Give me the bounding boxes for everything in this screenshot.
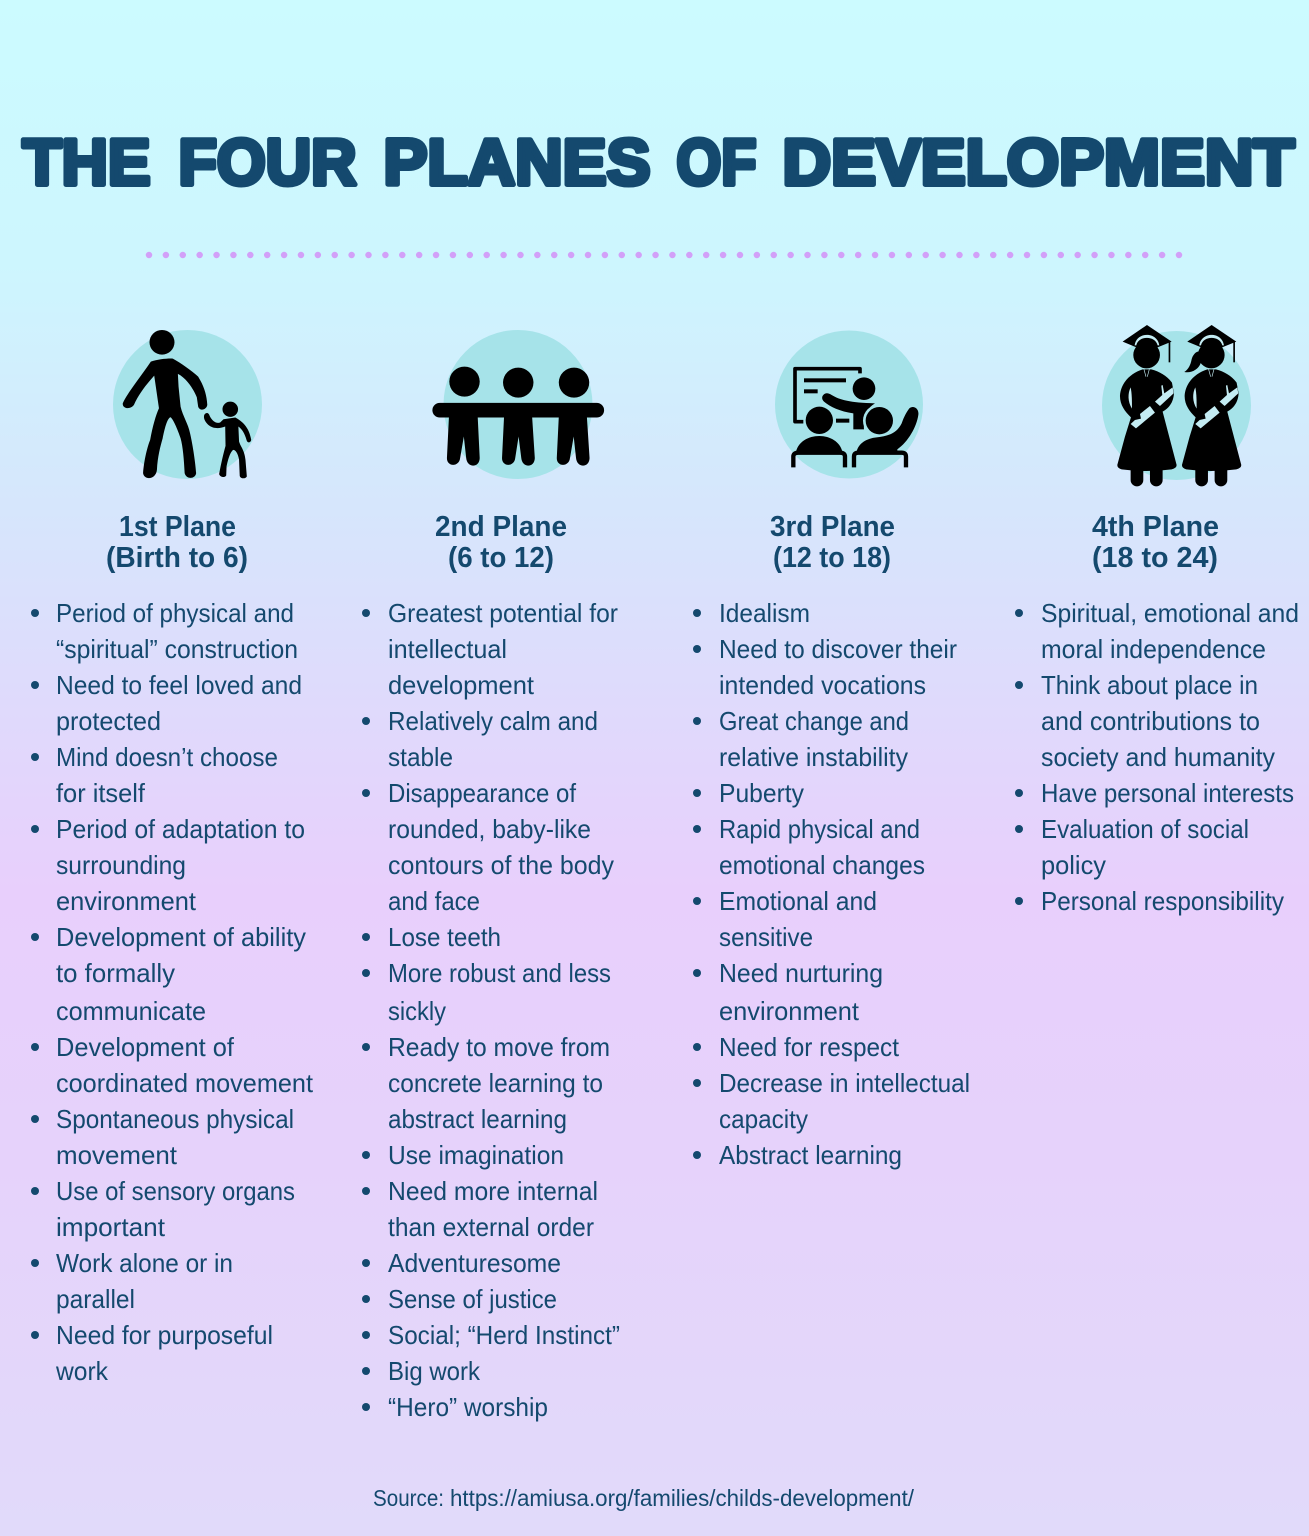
icon: three children holding a bar bbox=[432, 330, 604, 479]
bullet list: 2nd plane: intellectual bbox=[388, 634, 507, 664]
bullet list: 4th plane: Spiritual, emotional and bbox=[1041, 598, 1299, 628]
bullet list: 2nd plane bbox=[362, 598, 620, 1422]
bullet list: 1st plane: communicate bbox=[56, 996, 206, 1026]
bullet list: 3rd plane: Need to discover their bbox=[719, 634, 957, 664]
bullet list: 2nd plane: than external order bbox=[388, 1212, 594, 1242]
bullet list: 1st plane: parallel bbox=[56, 1284, 135, 1314]
bullet list: 1st plane: Development of ability bbox=[56, 922, 306, 952]
bullet list: 1st plane: movement bbox=[56, 1140, 178, 1170]
bullet list: 1st plane: Use of sensory organs bbox=[56, 1176, 295, 1206]
bullet list: 1st plane: Need to feel loved and bbox=[56, 670, 302, 700]
bullet list: 2nd plane: Disappearance of bbox=[388, 778, 577, 808]
bullet list: 2nd plane: Lose teeth bbox=[388, 922, 501, 952]
bullet list: 4th plane: Have personal interests bbox=[1041, 778, 1294, 808]
bullet list: 3rd plane bbox=[693, 598, 970, 1170]
icon: adult holding child's hand bbox=[113, 330, 262, 479]
bullet list: 2nd plane: abstract learning bbox=[388, 1104, 567, 1134]
heading: 2nd plane: (6 to 12) bbox=[448, 542, 554, 574]
title: DEVELOPMENT bbox=[782, 126, 1294, 198]
title: PLANES bbox=[384, 126, 650, 198]
bullet list: 2nd plane: “Hero” worship bbox=[388, 1392, 548, 1422]
bullet list: 3rd plane: environment bbox=[719, 996, 860, 1026]
bullet list: 2nd plane: stable bbox=[388, 742, 453, 772]
bullet list: 3rd plane: Need nurturing bbox=[719, 958, 883, 988]
icon: two graduates in caps and gowns bbox=[1102, 325, 1251, 486]
heading: 3rd plane bbox=[770, 511, 895, 574]
bullet list: 1st plane: “spiritual” construction bbox=[56, 634, 298, 664]
bullet list: 1st plane: important bbox=[56, 1212, 166, 1242]
title: THE bbox=[22, 126, 150, 198]
heading: 3rd plane: 3rd Plane bbox=[770, 511, 895, 543]
bullet list: 3rd plane: capacity bbox=[719, 1104, 808, 1134]
bullet list: 3rd plane: Idealism bbox=[719, 598, 810, 628]
bullet list: 4th plane: Think about place in bbox=[1041, 670, 1258, 700]
bullet list: 4th plane bbox=[1015, 598, 1299, 916]
bullet list: 4th plane: moral independence bbox=[1041, 634, 1266, 664]
bullet list: 2nd plane: Social; “Herd Instinct” bbox=[388, 1320, 620, 1350]
panel: 4th plane bbox=[1015, 325, 1299, 916]
source line: https://amiusa.org/families/childs-development/ bbox=[450, 1485, 915, 1511]
bullet list: 2nd plane: Ready to move from bbox=[388, 1032, 610, 1062]
bullet list: 1st plane: Development of bbox=[56, 1032, 235, 1062]
bullet list: 2nd plane: Use imagination bbox=[388, 1140, 564, 1170]
heading: 2nd plane bbox=[435, 511, 567, 574]
heading: 4th plane bbox=[1092, 511, 1219, 574]
bullet list: 2nd plane: Relatively calm and bbox=[388, 706, 598, 736]
panel: 3rd plane bbox=[693, 330, 970, 1170]
bullet list: 4th plane: society and humanity bbox=[1041, 742, 1275, 772]
bullet list: 2nd plane: Adventuresome bbox=[388, 1248, 561, 1278]
bullet list: 1st plane: work bbox=[55, 1356, 109, 1386]
bullet list: 2nd plane: Big work bbox=[388, 1356, 481, 1386]
bullet list: 3rd plane: Abstract learning bbox=[719, 1140, 902, 1170]
icon: teacher and students at a board bbox=[775, 330, 923, 478]
source line: Source: bbox=[373, 1485, 444, 1511]
bullet list: 3rd plane: intended vocations bbox=[719, 670, 926, 700]
bullet list: 2nd plane: Greatest potential for bbox=[388, 598, 618, 628]
bullet list: 1st plane: coordinated movement bbox=[56, 1068, 314, 1098]
panel: 1st plane bbox=[31, 330, 314, 1386]
bullet list: 1st plane: Period of physical and bbox=[56, 598, 294, 628]
bullet list: 3rd plane: relative instability bbox=[719, 742, 908, 772]
heading: 3rd plane: (12 to 18) bbox=[773, 542, 891, 574]
bullet list: 2nd plane: Need more internal bbox=[388, 1176, 598, 1206]
heading: 1st plane: 1st Plane bbox=[119, 511, 236, 543]
bullet list: 1st plane bbox=[31, 598, 314, 1386]
bullet list: 3rd plane: Need for respect bbox=[719, 1032, 900, 1062]
bullet list: 3rd plane: Emotional and bbox=[719, 886, 877, 916]
bullet list: 2nd plane: rounded, baby-like bbox=[388, 814, 591, 844]
bullet list: 4th plane: Evaluation of social bbox=[1041, 814, 1249, 844]
bullet list: 1st plane: Need for purposeful bbox=[56, 1320, 273, 1350]
bullet list: 3rd plane: Great change and bbox=[719, 706, 909, 736]
bullet list: 1st plane: environment bbox=[56, 886, 197, 916]
title: FOUR bbox=[178, 126, 356, 198]
bullet list: 1st plane: Work alone or in bbox=[56, 1248, 233, 1278]
bullet list: 2nd plane: contours of the body bbox=[388, 850, 614, 880]
bullet list: 2nd plane: development bbox=[388, 670, 535, 700]
ponytail bbox=[1184, 351, 1201, 372]
panel: 2nd plane bbox=[362, 330, 620, 1422]
title bbox=[22, 126, 1294, 198]
bullet list: 1st plane: Spontaneous physical bbox=[56, 1104, 294, 1134]
title: OF bbox=[676, 126, 756, 198]
bullet list: 1st plane: surrounding bbox=[56, 850, 186, 880]
bullet list: 1st plane: protected bbox=[56, 706, 161, 736]
bullet list: 2nd plane: sickly bbox=[388, 996, 446, 1026]
bullet list: 3rd plane: Decrease in intellectual bbox=[719, 1068, 970, 1098]
bullet list: 1st plane: for itself bbox=[56, 778, 146, 808]
heading: 4th plane: 4th Plane bbox=[1092, 511, 1219, 543]
bullet list: 1st plane: Mind doesn’t choose bbox=[56, 742, 278, 772]
bullet list: 2nd plane: More robust and less bbox=[388, 958, 611, 988]
heading: 4th plane: (18 to 24) bbox=[1092, 542, 1218, 574]
bullet list: 3rd plane: Puberty bbox=[719, 778, 804, 808]
bullet list: 4th plane: and contributions to bbox=[1041, 706, 1260, 736]
bullet list: 4th plane: Personal responsibility bbox=[1041, 886, 1284, 916]
bullet list: 2nd plane: and face bbox=[388, 886, 480, 916]
heading: 2nd plane: 2nd Plane bbox=[435, 511, 567, 543]
bullet list: 3rd plane: Rapid physical and bbox=[719, 814, 920, 844]
bullet list: 1st plane: Period of adaptation to bbox=[56, 814, 305, 844]
bullet list: 1st plane: to formally bbox=[56, 958, 175, 988]
bullet list: 2nd plane: concrete learning to bbox=[388, 1068, 603, 1098]
bullet list: 4th plane: policy bbox=[1041, 850, 1106, 880]
bullet list: 2nd plane: Sense of justice bbox=[388, 1284, 557, 1314]
heading: 1st plane: (Birth to 6) bbox=[106, 542, 248, 574]
bullet list: 3rd plane: sensitive bbox=[719, 922, 813, 952]
bullet list: 3rd plane: emotional changes bbox=[719, 850, 925, 880]
heading: 1st plane bbox=[106, 511, 248, 574]
